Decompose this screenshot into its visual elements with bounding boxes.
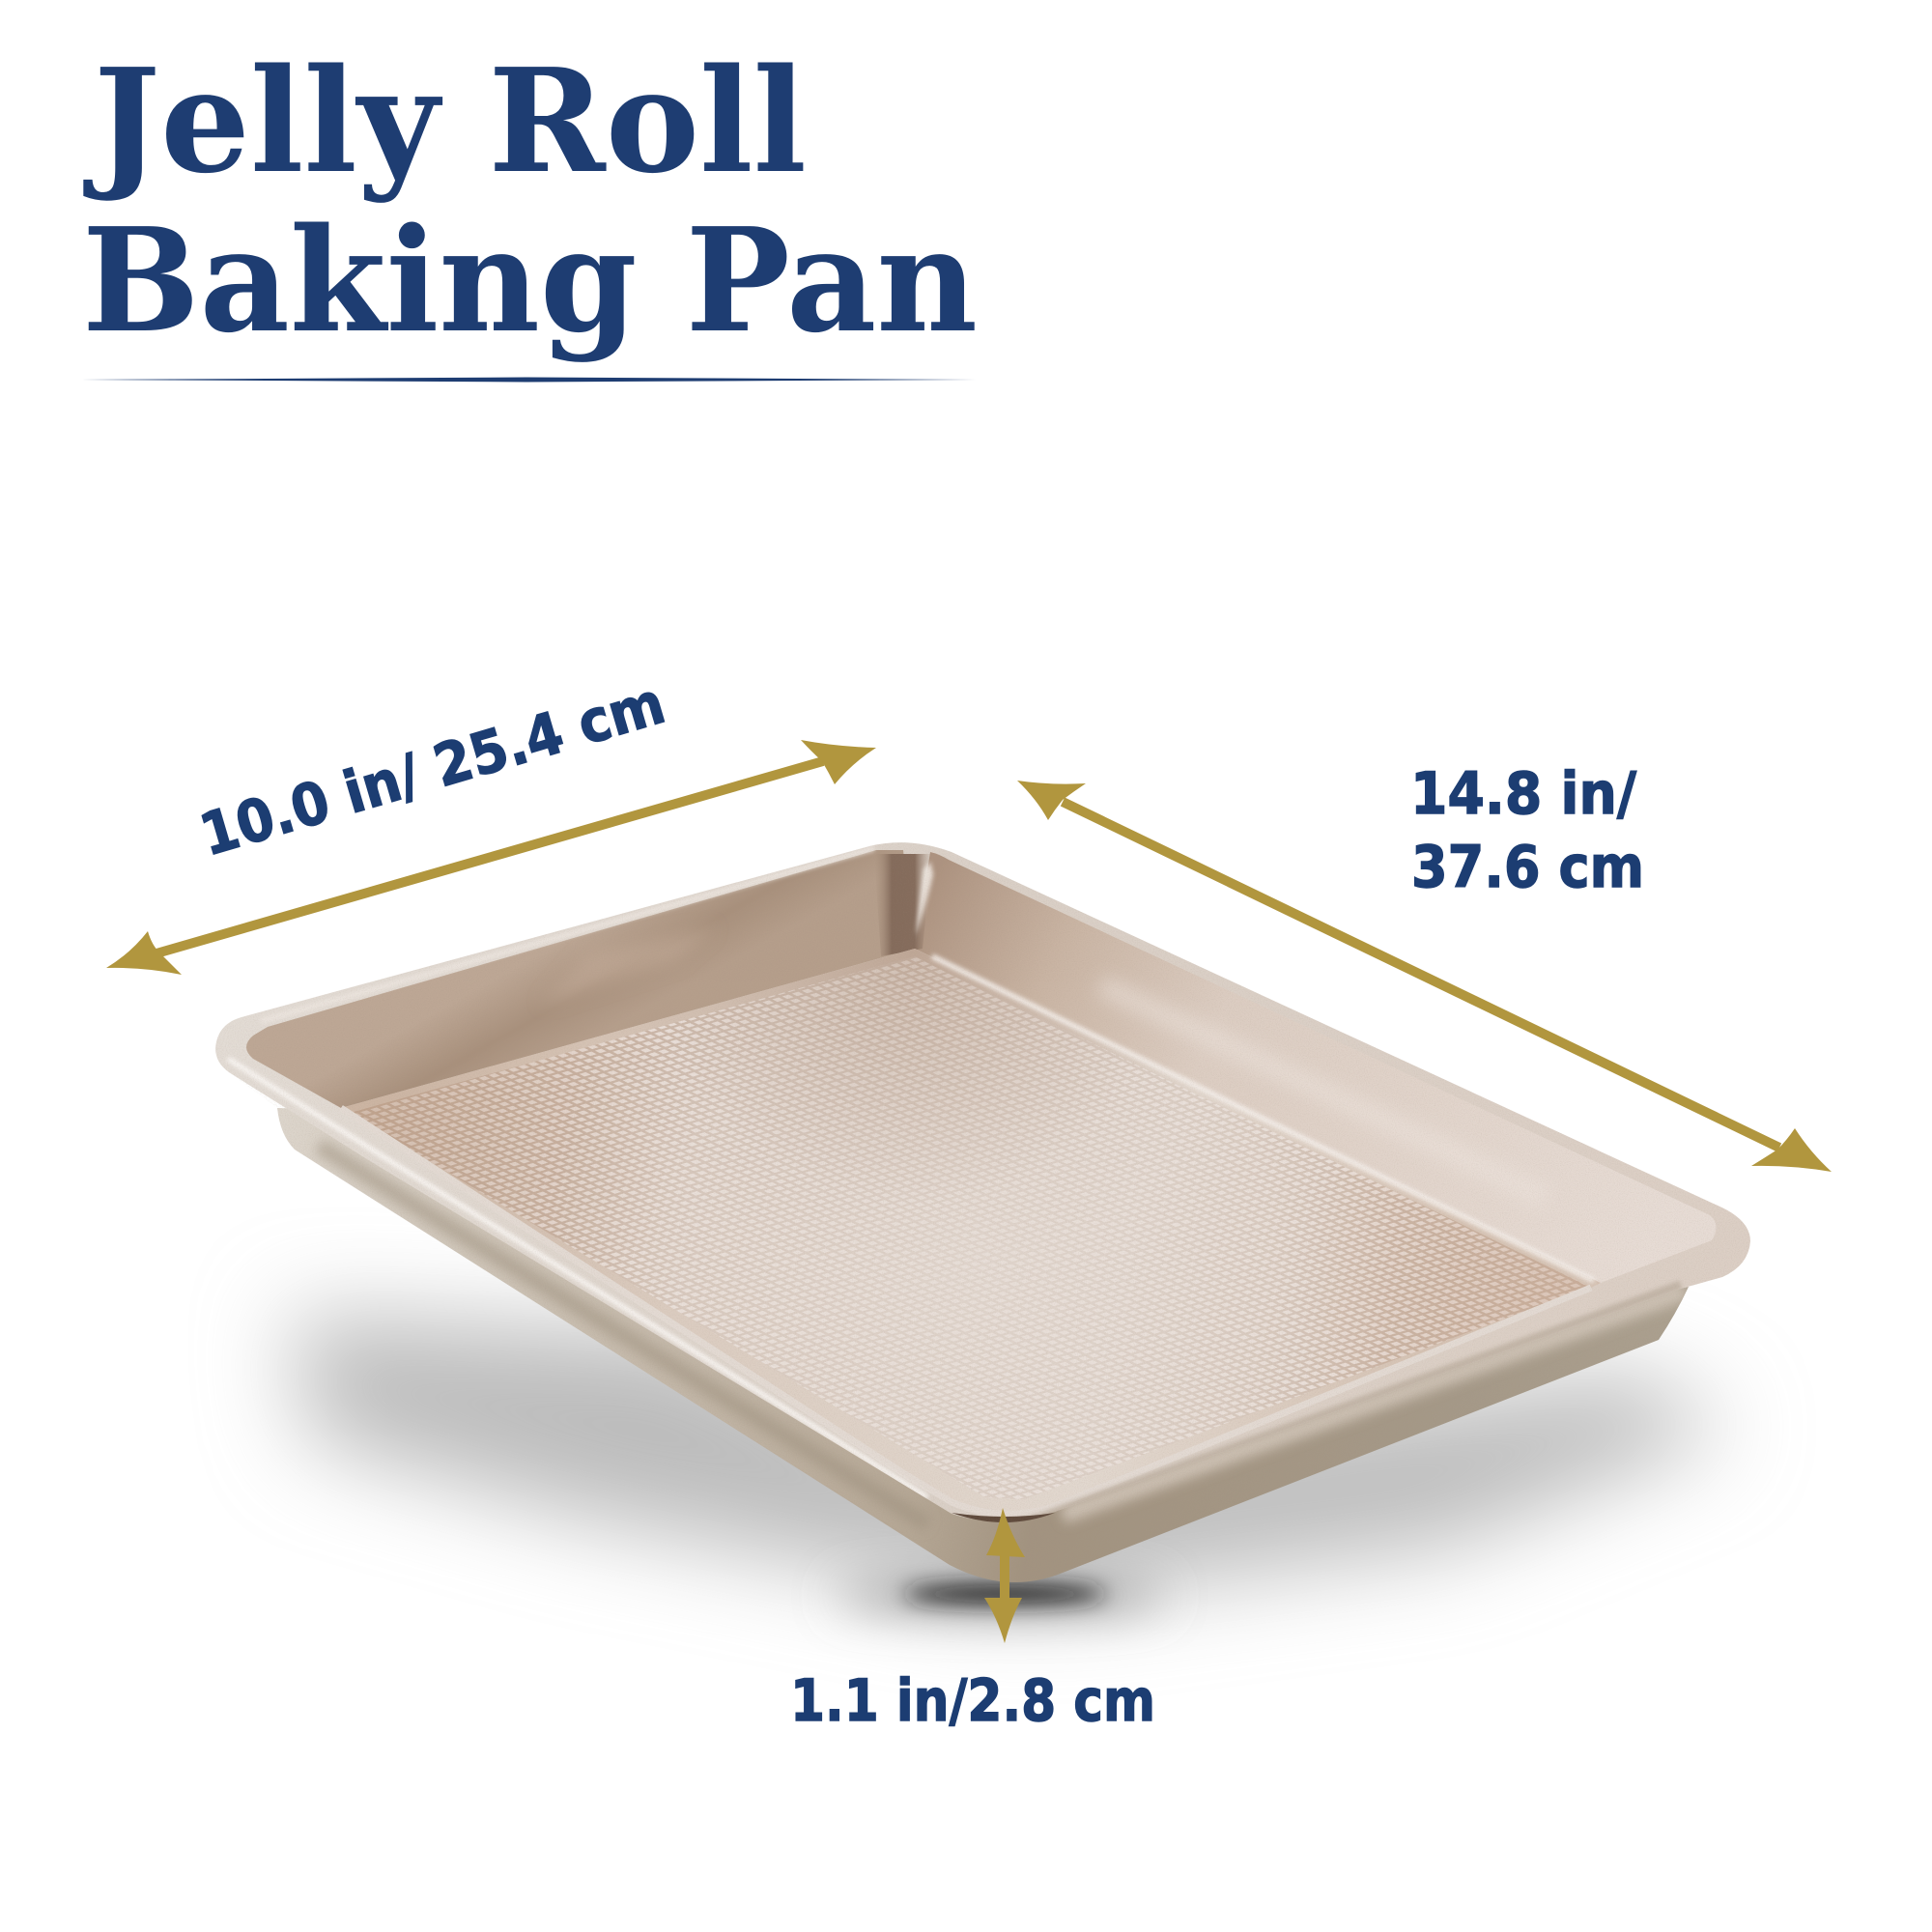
- arrow: length 14.8 in: [1017, 781, 1832, 1172]
- inner back left wall: [246, 850, 915, 1108]
- pan rim: [215, 842, 1750, 1521]
- floor dimple texture: [350, 956, 1589, 1499]
- label: length: [1410, 760, 1644, 901]
- streaks on right wall: [1101, 985, 1546, 1198]
- inner back right wall: [915, 852, 1717, 1283]
- rim crease highlights: [228, 848, 1681, 1524]
- arrow: width 10.0 in: [106, 740, 876, 975]
- floor corner tints: [350, 956, 1589, 1499]
- label: length: 14.8 in/: [1410, 760, 1636, 828]
- pan shadow on the ground: [290, 1314, 1729, 1609]
- title: Baking Pan: [82, 196, 978, 364]
- title underline: [81, 377, 976, 383]
- label: height: 1.1 in/2.8 cm: [790, 1667, 1155, 1735]
- pale floor centre: [350, 956, 1589, 1499]
- soft bands on left wall: [541, 927, 715, 1005]
- baking pan: [193, 831, 1768, 1604]
- pan outer wall: [277, 1108, 1689, 1582]
- back corner highlight: [916, 862, 933, 935]
- back corner shading: [874, 854, 932, 956]
- arrow: height 1.1 in: [984, 1508, 1025, 1643]
- smooth strip round the floor edge: [341, 1108, 1591, 1514]
- title: Jelly Roll: [83, 37, 807, 205]
- label: width: 10.0 in/ 25.4 cm: [192, 669, 672, 869]
- inner edge highlight: [932, 956, 1594, 1281]
- front corner dark crease: [952, 1513, 1055, 1522]
- label: length: 37.6 cm: [1411, 834, 1644, 901]
- wall sheen along the front left and soft fade under the right rim: [319, 1146, 1686, 1524]
- pan floor: [341, 949, 1601, 1514]
- metal grain: [216, 843, 1748, 1517]
- title: [82, 37, 978, 364]
- floor top corner tone: [341, 949, 1601, 1514]
